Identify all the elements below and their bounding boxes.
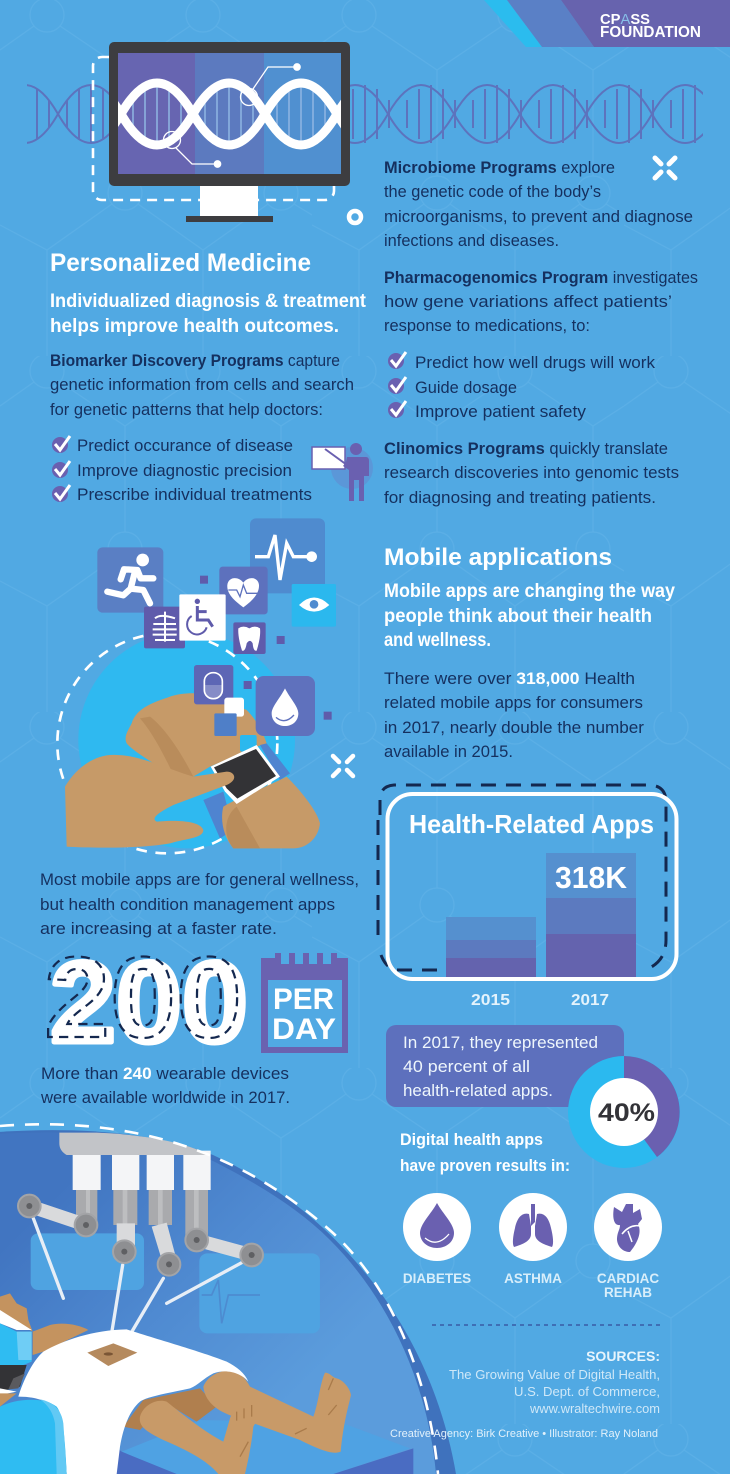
checklist: biomarker: Predict occurance of disease [77, 436, 293, 455]
text: pharmacogenomics: how gene variations affect patients’ [384, 292, 672, 311]
text: general wellness: but health condition management apps [40, 895, 335, 914]
screen [118, 53, 341, 174]
labels: conditions: ASTHMA [504, 1271, 562, 1286]
text: microbiome: infections and diseases. [384, 231, 559, 250]
subheading: mobile: Mobile apps are changing the way [384, 581, 675, 602]
table base [115, 1447, 413, 1474]
hand: upper [126, 693, 267, 777]
text: biomarker [50, 351, 354, 419]
icon: per day calendar: PER [273, 983, 334, 1016]
checklist: biomarker: Prescribe individual treatments [77, 485, 312, 504]
labels: conditions: REHAB [604, 1285, 652, 1300]
text: microbiome: microorganisms, to prevent and diagnose [384, 207, 693, 226]
icon: per day calendar: DAY [272, 1013, 336, 1046]
illustration: patient [0, 1293, 413, 1474]
hand: wrist [222, 777, 320, 848]
subheading: mobile [384, 581, 675, 651]
divider: sources [432, 1324, 660, 1326]
instruments [33, 1218, 242, 1345]
white sleeves [73, 1151, 211, 1190]
text: sources [449, 1348, 660, 1416]
face [0, 1293, 33, 1332]
text: pharmacogenomics: Pharmacogenomics Program investigates [384, 268, 698, 287]
text: general wellness: Most mobile apps are for general wellness, [40, 870, 359, 889]
tile: runner [97, 547, 163, 613]
axis labels [471, 992, 609, 1009]
text: biomarker: genetic information from cells and search [50, 375, 354, 394]
icon: ring [349, 211, 361, 223]
heading: digital health apps: have proven results in: [400, 1157, 570, 1175]
frame [109, 42, 350, 186]
icon: presenter [312, 443, 373, 501]
headband [0, 1365, 27, 1390]
text: sources: The Growing Value of Digital Health, [449, 1367, 660, 1382]
heading: digital health apps [400, 1131, 570, 1175]
text: mobile stat [384, 669, 644, 761]
text: general wellness [40, 870, 359, 938]
small purple dots [200, 576, 332, 720]
value: 318K [555, 860, 628, 895]
text: wearables [40, 1064, 290, 1107]
callout upper [240, 64, 300, 106]
white frame [388, 794, 676, 979]
icon: per day calendar [261, 953, 348, 1053]
dashed frame behind monitor [93, 57, 334, 200]
dashed circle [57, 633, 277, 853]
dashed arc [0, 1124, 438, 1474]
icon: sparkle x middle [333, 756, 353, 776]
monitor with DNA [109, 42, 350, 222]
checklist: pharmacogenomics: Predict how well drugs will work [415, 353, 655, 372]
bars 2017 [546, 853, 636, 977]
tile: heart [219, 567, 268, 614]
tile: ribcage [144, 607, 185, 648]
tile: eye [292, 584, 336, 627]
subheading: mobile: people think about their health [384, 606, 652, 627]
subheading: personalized medicine: Individualized diagnosis & treatment [50, 291, 367, 312]
text: pharmacogenomics: response to medications, to: [384, 316, 590, 335]
subheading: mobile: and wellness. [384, 630, 491, 651]
text: pharmacogenomics [384, 268, 698, 335]
text: sources: www.wraltechwire.com [529, 1401, 660, 1416]
text: microbiome [384, 158, 693, 250]
text: clinomics [384, 439, 679, 507]
hand: pointing [65, 755, 234, 848]
chart: 40 percent donut: 40% [598, 1099, 655, 1127]
text: credits: Creative Agency: Birk Creative • Illustrator: Ray Noland [390, 1428, 658, 1440]
chair [0, 1400, 67, 1474]
checklist: pharmacogenomics: Guide dosage [415, 378, 517, 397]
chart: 40 percent donut [568, 1056, 680, 1168]
illustration: robotic arms [18, 1133, 320, 1345]
near leg [140, 1401, 262, 1474]
far leg [203, 1371, 351, 1453]
icon: asthma lungs [499, 1193, 567, 1261]
cyan circle [78, 632, 295, 848]
bars 2015 [446, 917, 536, 977]
callout: 40 percent [386, 1025, 624, 1107]
tile: wheelchair [179, 594, 226, 641]
text: sources: SOURCES: [586, 1348, 660, 1364]
text: biomarker: for genetic patterns that help doctors: [50, 400, 323, 419]
text: microbiome: the genetic code of the body’s [384, 182, 601, 201]
stat: 200: 200 [44, 934, 242, 1062]
logo text [600, 11, 701, 41]
text: mobile stat: There were over 318,000 Health [384, 669, 635, 688]
illustration: smartwatch with health icons [57, 518, 336, 853]
text: biomarker: Biomarker Discovery Programs capture [50, 351, 340, 370]
text: clinomics: research discoveries into genomic tests [384, 463, 679, 482]
axis labels: 2015 [471, 992, 510, 1009]
callout: 40 percent: health-related apps. [403, 1081, 553, 1100]
checklist: pharmacogenomics: Improve patient safety [415, 402, 586, 421]
logo text: CPASS [600, 11, 650, 28]
heading: mobile applications: Mobile applications [384, 544, 612, 571]
table top [122, 1420, 410, 1474]
checklist: biomarker: Improve diagnostic precision [77, 461, 292, 480]
axis labels: 2017 [571, 992, 609, 1009]
text: clinomics: Clinomics Programs quickly translate [384, 439, 668, 458]
icon: diabetes [403, 1193, 471, 1261]
subheading: personalized medicine [50, 291, 367, 337]
heading: digital health apps: Digital health apps [400, 1131, 543, 1149]
icon: sparkle x top [655, 158, 675, 178]
sheet [18, 1329, 248, 1474]
robot head [59, 1133, 210, 1155]
header logo banner [484, 0, 730, 47]
text: wearables: More than 240 wearable devices [41, 1064, 289, 1083]
callout: 40 percent: In 2017, they represented [403, 1033, 598, 1052]
joints [18, 1195, 263, 1276]
DNA strand background [0, 85, 718, 143]
white helix [118, 78, 341, 150]
watch face [211, 745, 280, 804]
logo text: FOUNDATION [600, 24, 701, 41]
labels: conditions [403, 1271, 659, 1300]
tile: pill [194, 665, 233, 704]
text: sources: U.S. Dept. of Commerce, [514, 1384, 660, 1399]
cap [0, 1310, 32, 1330]
chart title: Health-Related Apps [409, 809, 654, 839]
text: clinomics: for diagnosing and treating patients. [384, 488, 656, 507]
far leg shadow [123, 1388, 217, 1430]
labels: conditions: DIABETES [403, 1271, 471, 1286]
stat: 200: 200 [50, 939, 248, 1067]
tile: tooth [233, 622, 266, 654]
heading: personalized medicine: Personalized Medicine [50, 249, 311, 277]
text: mobile stat: in 2017, nearly double the number [384, 718, 644, 737]
stand [200, 184, 258, 217]
watch band [203, 743, 290, 838]
dashed outline [378, 785, 666, 970]
columns [29, 1190, 252, 1265]
toes [237, 1378, 337, 1457]
tile: water drop [256, 676, 315, 736]
text: wearables: were available worldwide in 2017. [40, 1088, 290, 1107]
shoulder [33, 1324, 88, 1355]
text: mobile stat: available in 2015. [384, 742, 513, 761]
checklist: biomarker [52, 436, 312, 504]
text: general wellness: are increasing at a faster rate. [40, 919, 277, 938]
callout lower [164, 132, 221, 167]
chart: health-related apps [378, 785, 676, 1009]
subheading: personalized medicine: helps improve health outcomes. [50, 316, 339, 337]
icon: cardiac heart [594, 1193, 662, 1261]
incision patch [87, 1343, 137, 1366]
light tile [31, 1233, 144, 1290]
surgical circle background [0, 1130, 456, 1474]
tile: ECG [250, 518, 325, 593]
checklist: pharmacogenomics [388, 352, 655, 421]
text: mobile stat: related mobile apps for consumers [384, 693, 643, 712]
mask [0, 1323, 32, 1365]
small squares [214, 698, 257, 752]
light tile with ECG [199, 1253, 320, 1333]
callout: 40 percent: 40 percent of all [403, 1057, 530, 1076]
text: microbiome: Microbiome Programs explore [384, 158, 615, 177]
labels: conditions: CARDIAC [597, 1271, 659, 1286]
